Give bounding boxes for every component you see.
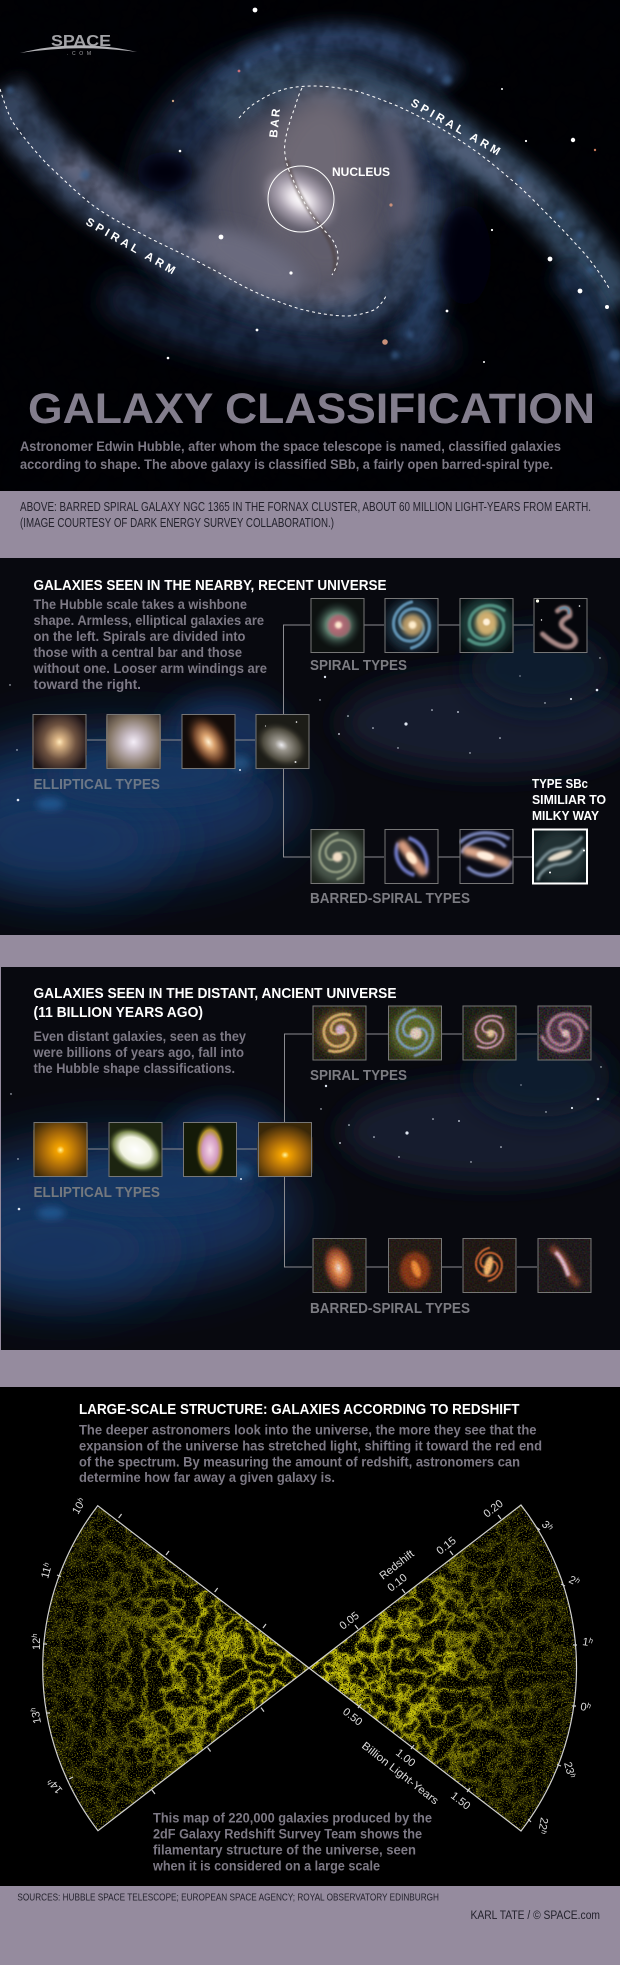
description: determine how far away a given galaxy is. (79, 1470, 335, 1485)
intro text (20, 439, 561, 472)
map caption: filamentary structure of the universe, seen (153, 1843, 416, 1858)
description (33, 1029, 246, 1076)
label: barred spiral types: BARRED-SPIRAL TYPES (310, 1300, 470, 1317)
description: of the spectrum. By measuring the amount of redshift, astronomers can (79, 1454, 520, 1470)
thumbnail: spiral 2 (384, 598, 439, 653)
light-year axis labels: Billion Light-Years (359, 1740, 441, 1808)
light-year axis labels (340, 1706, 472, 1813)
hour labels: h (588, 1636, 594, 1645)
label: elliptical types: ELLIPTICAL TYPES (34, 776, 160, 793)
thumbnail: spiral 3 (459, 598, 514, 653)
description: toward the right. (34, 677, 141, 692)
redshift axis labels: 0.05 (337, 1610, 362, 1632)
hour labels: 3 (539, 1519, 552, 1531)
hour labels: h (28, 1707, 38, 1713)
footer: credit: KARL TATE / © SPACE.com (470, 1910, 600, 1922)
footer: sources: SOURCES: HUBBLE SPACE TELESCOPE; EUROPEAN SPACE AGENCY; ROYAL OBSERVATORY EDINBURGH (17, 1892, 439, 1904)
caption band: (IMAGE COURTESY OF DARK ENERGY SURVEY COLLABORATION.) (20, 516, 334, 530)
redshift axis labels: Redshift (377, 1548, 417, 1582)
heading: GALAXIES SEEN IN THE DISTANT, ANCIENT UNIVERSE (34, 986, 397, 1002)
stars (167, 8, 609, 363)
heading: (11 BILLION YEARS AGO) (34, 1005, 203, 1021)
wedge outlines and ticks (43, 1505, 577, 1831)
arrow: upper spiral arm dashed outline (239, 86, 609, 288)
description: were billions of years ago, fall into (33, 1045, 244, 1060)
hour labels: 0 (580, 1701, 587, 1714)
light-year axis labels: 1.50 (448, 1790, 472, 1813)
description: on the left. Spirals are divided into (34, 629, 246, 644)
title: GALAXY CLASSIFICATION (28, 385, 595, 433)
thumbnail: distant barred 2 (388, 1238, 442, 1293)
description: The deeper astronomers look into the universe, the more they see that the (79, 1422, 537, 1438)
thumbnail: distant elliptical 1 (33, 1122, 88, 1177)
thumbnail: distant elliptical 2 (108, 1122, 162, 1177)
thumbnail: elliptical 2 (106, 714, 161, 769)
hour labels: 12 (31, 1638, 43, 1650)
hour labels: h (539, 1829, 549, 1835)
thumbnail: spiral 4 (534, 598, 588, 653)
thumbnail: distant spiral 4 (538, 1006, 592, 1060)
logo: SPACE.com: .COM (67, 51, 91, 57)
label: elliptical types: ELLIPTICAL TYPES (34, 1184, 160, 1201)
callout: type SBc (532, 776, 606, 823)
hour labels: 10 (70, 1500, 87, 1516)
label: lower spiral arm: SPIRAL ARM (84, 216, 177, 277)
description: Even distant galaxies, seen as they (34, 1029, 246, 1044)
description: without one. Looser arm windings are (33, 661, 267, 676)
callout: type SBc: MILKY WAY (532, 808, 599, 823)
intro text: Astronomer Edwin Hubble, after whom the space telescope is named, classified galaxies (20, 439, 561, 454)
thumbnail: barred spiral 4 (Milky Way type) (532, 828, 588, 884)
redshift axis labels: 0.15 (434, 1535, 459, 1557)
hour labels: 23 (561, 1761, 576, 1776)
description: shape. Armless, elliptical galaxies are (34, 613, 264, 628)
thumbnail: distant spiral 3 (462, 1006, 516, 1060)
description: expansion of the universe has stretched light, shifting it toward the red end (79, 1438, 542, 1454)
panel: large-scale structure (0, 1387, 620, 1886)
wishbone connector lines (86, 625, 533, 857)
light-year axis labels: 1.00 (393, 1747, 417, 1770)
heading: GALAXIES SEEN IN THE NEARBY, RECENT UNIVERSE (34, 578, 387, 594)
nucleus circle (268, 166, 334, 232)
caption band (0, 491, 620, 558)
hour labels: 2 (567, 1574, 577, 1587)
heading: LARGE-SCALE STRUCTURE: GALAXIES ACCORDING TO REDSHIFT (79, 1402, 520, 1418)
hour labels: 13 (30, 1710, 44, 1725)
left wedge galaxy field (43, 1508, 308, 1830)
callout: type SBc: SIMILIAR TO (532, 792, 606, 807)
nebula background (1, 967, 620, 1350)
thumbnail: barred spiral 2 (384, 829, 438, 884)
chart: redshift survey map (28, 1496, 594, 1840)
galaxy NGC 1365 image (0, 0, 620, 491)
description (33, 597, 267, 692)
thumbnail: distant barred 3 (462, 1238, 516, 1293)
thumbnail: distant barred 4 (538, 1238, 592, 1293)
redshift axis labels: 0.10 (385, 1572, 410, 1594)
thumbnail: distant barred 1 (312, 1238, 366, 1293)
thumbnail: elliptical 3 (182, 714, 236, 769)
label: spiral types: SPIRAL TYPES (310, 657, 407, 674)
description (79, 1422, 542, 1485)
hour labels: h (574, 1576, 582, 1585)
map caption (152, 1810, 432, 1874)
hour labels: h (30, 1634, 39, 1638)
label: barred spiral types: BARRED-SPIRAL TYPES (310, 890, 470, 907)
label: bar: BAR (268, 108, 283, 138)
nebula background (0, 558, 620, 935)
redshift axis labels: 0.20 (481, 1498, 506, 1520)
label: nucleus: NUCLEUS (332, 165, 390, 179)
hour labels: 11 (39, 1566, 54, 1580)
hour labels: h (41, 1561, 51, 1568)
heading (34, 986, 397, 1021)
thumbnail: distant spiral 2 (388, 1006, 442, 1060)
hour labels: h (45, 1778, 54, 1787)
intro text: according to shape. The above galaxy is classified SBb, a fairly open barred-spiral type. (20, 457, 553, 472)
hour labels: h (586, 1701, 592, 1710)
wishbone connector lines (88, 1034, 537, 1267)
description: The Hubble scale takes a wishbone (34, 597, 247, 612)
arrow: lower spiral arm dashed outline (0, 89, 386, 316)
label: spiral types: SPIRAL TYPES (310, 1067, 407, 1084)
thumbnail: distant spiral 1 (312, 1006, 367, 1060)
panel: nearby universe (0, 558, 620, 958)
thumbnail: barred spiral 3 (459, 829, 514, 884)
arrow: bar dashed outline (285, 88, 338, 275)
thumbnail: spiral 1 (310, 598, 364, 653)
description: the Hubble shape classifications. (34, 1061, 235, 1076)
thumbnail: distant elliptical 4 (258, 1122, 312, 1177)
dark mottling over the arms (0, 0, 620, 491)
hour labels (28, 1496, 594, 1835)
hour labels: h (568, 1772, 578, 1779)
redshift axis labels (337, 1498, 506, 1632)
thumbnail: barred spiral 1 (310, 829, 365, 884)
thumbnail: distant elliptical 3 (183, 1122, 237, 1177)
right wedge galaxy field (300, 1500, 580, 1840)
logo: SPACE.com: SPACE (51, 33, 111, 50)
light-year axis labels: 0.50 (340, 1706, 364, 1729)
hour labels: h (546, 1522, 555, 1532)
hour labels: 1 (582, 1636, 589, 1649)
thumbnail: elliptical 4 (256, 714, 310, 769)
map caption: 2dF Galaxy Redshift Survey Team shows the (153, 1827, 422, 1842)
map caption: This map of 220,000 galaxies produced by the (153, 1810, 432, 1826)
label: upper spiral arm: SPIRAL ARM (408, 97, 502, 158)
panel: distant universe (0, 967, 620, 1367)
thumbnail: elliptical 1 (32, 714, 87, 769)
panel: hero galaxy photo (0, 0, 620, 491)
map caption: when it is considered on a large scale (152, 1859, 380, 1874)
hour labels: 22 (536, 1816, 550, 1831)
description: those with a central bar and those (34, 645, 242, 660)
hour labels: 14 (48, 1779, 65, 1796)
logo: SPACE.com (20, 33, 137, 57)
callout: type SBc: TYPE SBc (532, 776, 588, 791)
hour labels: h (75, 1496, 85, 1504)
